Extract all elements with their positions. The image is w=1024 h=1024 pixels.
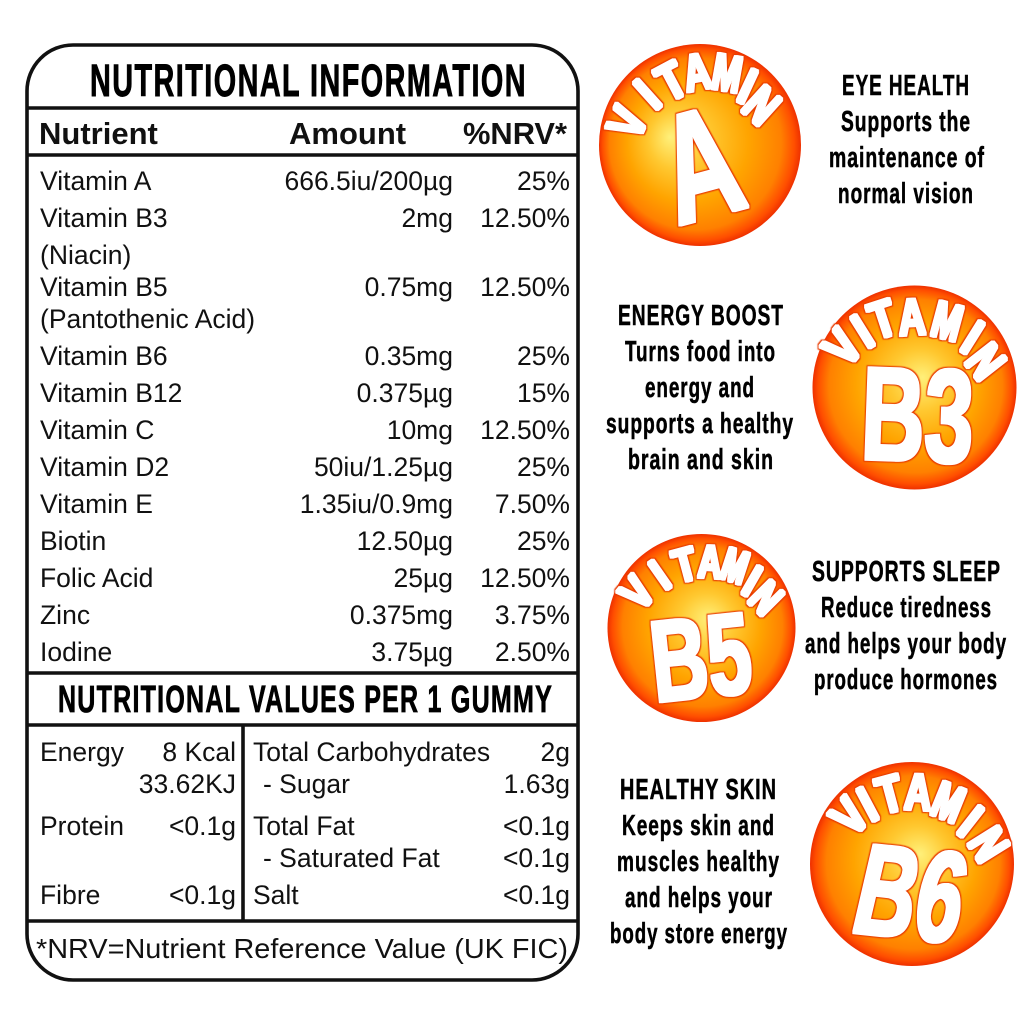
text: healthy skin: HEALTHY SKIN xyxy=(620,774,777,806)
panel outline xyxy=(27,45,578,980)
badge: vitamin B3: I xyxy=(842,303,883,359)
text: energy boost xyxy=(606,300,794,476)
energy, protein and fibre values: 8 Kcal xyxy=(162,737,236,767)
energy, protein and fibre values: 33.62KJ xyxy=(139,769,236,799)
badge: vitamin B6: A xyxy=(903,762,933,822)
nutrient table rows: 50iu/1.25µg xyxy=(314,452,453,482)
badge: vitamin B6: M xyxy=(924,771,972,835)
badge: vitamin B5: M xyxy=(715,539,754,595)
badge: vitamin B6: I xyxy=(849,775,886,832)
nutrient table rows: 7.50% xyxy=(495,489,570,519)
table header: Nutrient xyxy=(39,116,158,151)
subheading: values per gummy: NUTRITIONAL VALUES PER 1 GUMMY xyxy=(58,679,553,721)
nutrient table rows: Vitamin C xyxy=(40,415,154,445)
badge: vitamin B3: T xyxy=(861,287,904,351)
nutrient table rows: Vitamin B5 xyxy=(40,272,168,302)
nutrient table rows: 2mg xyxy=(401,203,453,233)
nutrient table rows: 0.35mg xyxy=(365,341,453,371)
energy, protein and fibre values: <0.1g xyxy=(169,880,236,910)
badge: vitamin B3: N xyxy=(954,333,1017,390)
text: healthy skin xyxy=(610,774,788,950)
badge: vitamin A: V xyxy=(595,97,659,147)
nutrient table rows: 12.50µg xyxy=(357,526,453,556)
nutrient table rows: 0.375µg xyxy=(357,378,453,408)
text: energy boost: ENERGY BOOST xyxy=(618,300,784,332)
carbohydrate, fat and salt values xyxy=(253,737,570,910)
text: healthy skin: body store energy xyxy=(610,918,788,950)
badge: vitamin A: T xyxy=(646,49,697,113)
table header xyxy=(39,116,568,151)
badge: vitamin A: I xyxy=(730,57,765,115)
nutrient table rows: 12.50% xyxy=(480,563,570,593)
badge: vitamin B5: N xyxy=(739,571,793,625)
carbohydrate, fat and salt values: <0.1g xyxy=(503,843,570,873)
nutrient table rows: 0.75mg xyxy=(365,272,453,302)
nutrient table rows: (Niacin) xyxy=(40,240,131,270)
nutrient table rows: Vitamin B3 xyxy=(40,203,168,233)
carbohydrate, fat and salt values: Salt xyxy=(253,880,299,910)
nutrient table rows: 12.50% xyxy=(480,415,570,445)
nutrient table rows: (Pantothenic Acid) xyxy=(40,304,255,334)
title: NUTRITIONAL INFORMATION xyxy=(90,55,527,106)
nutrient table rows: 25% xyxy=(517,166,570,196)
badge: vitamin A: N xyxy=(732,75,791,136)
carbohydrate, fat and salt values: Total Carbohydrates xyxy=(253,737,490,767)
nutrient table rows: 0.375mg xyxy=(350,600,453,630)
energy, protein and fibre values: Protein xyxy=(40,811,124,841)
badge: vitamin B6: N xyxy=(957,818,1021,872)
nutrient table rows: 15% xyxy=(517,378,570,408)
nutrient table rows: 10mg xyxy=(387,415,453,445)
table header: Amount xyxy=(289,116,406,151)
badge: vitamin B5: I xyxy=(734,556,770,607)
badge: vitamin B5: A xyxy=(697,535,723,589)
badge: vitamin A: A xyxy=(641,71,759,258)
nutrient table rows: Vitamin A xyxy=(40,166,152,196)
badge: vitamin B6: V xyxy=(818,786,880,846)
carbohydrate, fat and salt values: 1.63g xyxy=(504,769,570,799)
energy, protein and fibre values: Energy xyxy=(40,737,125,767)
carbohydrate, fat and salt values: 2g xyxy=(541,737,570,767)
energy, protein and fibre values: Fibre xyxy=(40,880,100,910)
nutrient table rows: 3.75% xyxy=(495,600,570,630)
energy, protein and fibre values: <0.1g xyxy=(169,811,236,841)
nutrient table rows: 25µg xyxy=(394,563,453,593)
text: energy boost: energy and xyxy=(645,372,755,404)
nutrient table rows: 12.50% xyxy=(480,272,570,302)
carbohydrate, fat and salt values: - Saturated Fat xyxy=(263,843,440,873)
carbohydrate, fat and salt values: Total Fat xyxy=(253,811,355,841)
text: energy boost: supports a healthy xyxy=(606,408,794,440)
badge: vitamin B5: T xyxy=(667,537,703,594)
text: eye health xyxy=(829,70,985,210)
nutrient table rows: 12.50% xyxy=(480,203,570,233)
text: supports sleep xyxy=(805,556,1007,696)
badge: vitamin A: M xyxy=(708,43,746,105)
text: healthy skin: and helps your xyxy=(625,882,773,914)
nutrient table rows: Vitamin E xyxy=(40,489,153,519)
text: healthy skin: Keeps skin and xyxy=(622,810,775,842)
badge: vitamin B6: I xyxy=(948,794,993,848)
nutrient table rows: 3.75µg xyxy=(371,637,453,667)
badge: vitamin B3: A xyxy=(897,287,927,347)
nutrient table rows: Iodine xyxy=(40,637,112,667)
nutrient table rows xyxy=(40,166,570,667)
badge: vitamin B6 xyxy=(810,762,1021,971)
badge: vitamin B3: V xyxy=(811,318,874,376)
nutrient table rows: 2.50% xyxy=(495,637,570,667)
badge: vitamin B5 xyxy=(608,534,796,727)
text: healthy skin: muscles healthy xyxy=(617,846,780,878)
nutrient table rows: 1.35iu/0.9mg xyxy=(300,489,453,519)
badge: vitamin A: I xyxy=(623,68,671,120)
badge: vitamin B5: B5 xyxy=(644,587,757,727)
nutrient table rows: 666.5iu/200µg xyxy=(284,166,453,196)
panel: nutrition label xyxy=(27,45,578,980)
badge: vitamin B3: M xyxy=(926,290,968,354)
badge: vitamin A: A xyxy=(678,41,715,103)
text: energy boost: Turns food into xyxy=(625,336,776,368)
carbohydrate, fat and salt values: - Sugar xyxy=(263,769,350,799)
text: energy boost: brain and skin xyxy=(628,444,774,476)
badge: vitamin B3 xyxy=(811,286,1017,492)
badge: vitamin B3: I xyxy=(952,309,993,365)
badge: vitamin B5: I xyxy=(641,551,680,600)
energy, protein and fibre values xyxy=(40,737,236,910)
carbohydrate, fat and salt values: <0.1g xyxy=(503,880,570,910)
nutrient table rows: Biotin xyxy=(40,526,106,556)
nutrient table rows: Zinc xyxy=(40,600,90,630)
nutrient table rows: 25% xyxy=(517,341,570,371)
badge: vitamin B6: T xyxy=(870,762,910,825)
table header: %NRV* xyxy=(463,116,568,151)
nutrient table rows: 25% xyxy=(517,452,570,482)
footnote: *NRV=Nutrient Reference Value (UK FIC) xyxy=(36,933,568,964)
nutrient table rows: Vitamin B6 xyxy=(40,341,168,371)
nutrient table rows: Vitamin B12 xyxy=(40,378,182,408)
nutrient table rows: Folic Acid xyxy=(40,563,153,593)
badge: vitamin A xyxy=(595,41,801,258)
carbohydrate, fat and salt values: <0.1g xyxy=(503,811,570,841)
nutrient table rows: 25% xyxy=(517,526,570,556)
badge: vitamin B5: V xyxy=(609,566,666,620)
nutrient table rows: Vitamin D2 xyxy=(40,452,169,482)
